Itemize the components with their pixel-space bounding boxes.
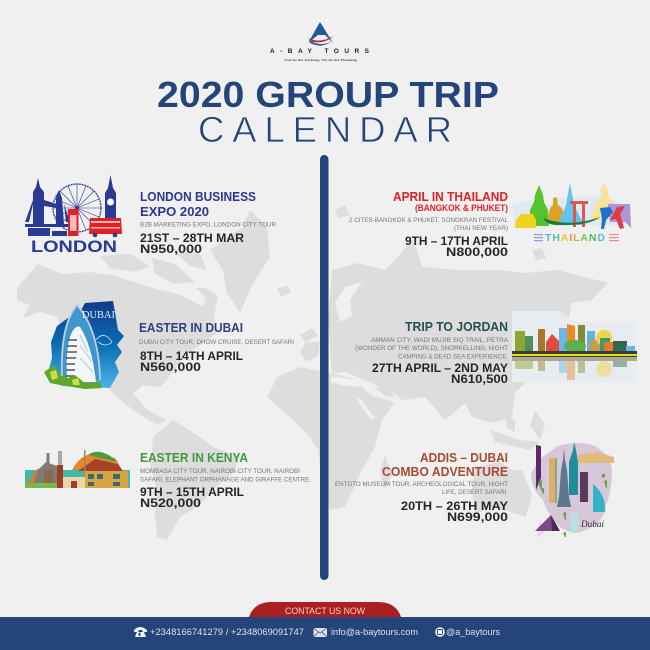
- text: Jordan details: CAMPING & DEAD SEA EXPERIENCE.: [398, 354, 508, 360]
- world map background: [17, 205, 608, 540]
- panel: April in Thailand: [349, 183, 631, 259]
- panel: London business expo: [25, 175, 276, 256]
- text: London details: LONDON BUSINESS: [140, 189, 256, 204]
- title: [157, 74, 499, 150]
- text: Kenya details: [140, 450, 311, 510]
- company logo: A-BAY TOURS: [270, 48, 370, 55]
- text: Thailand details: 2 CITES-BANGKOK & PHUKET, SONGKRAN FESTIVAL: [349, 217, 508, 224]
- icon: envelope: [314, 628, 327, 637]
- text: Addis details: 20TH – 26TH MAY: [401, 499, 508, 513]
- panel: Easter in Dubai: [44, 301, 294, 389]
- panel: Addis - Dubai combo adventure: [335, 442, 614, 537]
- contact footer bar: [0, 617, 650, 650]
- text: Jordan details: AMMAN CITY, WADI MUJIB SIQ TRAIL, PETRA: [371, 337, 508, 344]
- text: email: info@a-baytours.com: [331, 627, 418, 637]
- text: Thailand details: [349, 189, 509, 259]
- text: Kenya details: MOMBASA CITY TOUR, NAIROBI CITY TOUR, NAIROBI: [140, 468, 300, 475]
- text: Thailand details: (BANGKOK & PHUKET): [415, 203, 508, 213]
- text: Kenya details: 9TH – 15TH APRIL: [140, 485, 245, 499]
- icon: Dubai illustration: Dubai: [580, 519, 605, 529]
- text: London details: [140, 189, 276, 256]
- contact button: CONTACT US NOW: [285, 606, 365, 617]
- text: Thailand details: N800,000: [446, 245, 508, 259]
- contact button: [249, 602, 401, 617]
- text: Jordan details: 27TH APRIL – 2ND MAY: [372, 361, 508, 375]
- text: Dubai details: [139, 320, 294, 374]
- text: Kenya details: N520,000: [140, 496, 201, 510]
- text: London details: EXPO 2020: [140, 204, 209, 219]
- icon: London skyline: LONDON: [31, 238, 117, 256]
- panel: Easter in Kenya: [25, 450, 311, 510]
- text: Jordan details: TRIP TO JORDAN: [405, 319, 508, 334]
- text: Kenya details: EASTER IN KENYA: [140, 450, 249, 465]
- text: Addis details: LIFE, DESERT SAFARI.: [442, 489, 508, 496]
- icon: Burj Al Arab: DUBAI: [82, 309, 115, 321]
- icon: Dubai illustration: [531, 442, 614, 537]
- company logo: You do the Packing, We do the Planning: [284, 58, 357, 62]
- icon: Kenya landmarks: [25, 450, 130, 488]
- text: Addis details: ENTOTO MUSEUM TOUR, ARCHEOLOGICAL TOUR, NIGHT: [335, 481, 508, 488]
- text: London details: B2B MARKETING EXPO, LONDON CITY TOUR: [140, 222, 276, 228]
- text: Dubai details: EASTER IN DUBAI: [139, 320, 243, 335]
- text: London details: N950,000: [140, 242, 202, 256]
- text: London details: 21ST – 28TH MAR: [140, 231, 244, 245]
- text: Jordan details: (WONDER OF THE WORLD), SNORKELLING, NIGHT: [355, 345, 508, 352]
- text: Dubai details: 8TH – 14TH APRIL: [140, 349, 244, 363]
- text: Addis details: ADDIS – DUBAI: [420, 450, 508, 465]
- icon: Burj Al Arab: [44, 301, 124, 389]
- icon: instagram: [435, 627, 445, 637]
- text: phone numbers: +2348166741279 / +2348069091747: [150, 627, 304, 637]
- title: 2020 GROUP TRIP: [157, 74, 499, 115]
- icon: London skyline: [25, 175, 122, 256]
- text: Jordan details: N610,500: [451, 372, 508, 386]
- title: CALENDAR: [198, 109, 452, 150]
- panel: Trip to Jordan: [355, 311, 637, 386]
- icon: Jordan skyline: [512, 311, 637, 382]
- text: Dubai details: N560,000: [140, 360, 201, 374]
- text: Addis details: COMBO ADVENTURE: [382, 464, 508, 479]
- text: Thailand details: 9TH – 17TH APRIL: [405, 234, 509, 248]
- text: Thailand details: APRIL IN THAILAND: [393, 189, 508, 204]
- text: Addis details: N699,000: [447, 510, 508, 524]
- central timeline bar: [320, 155, 328, 580]
- company logo: [270, 22, 370, 62]
- text: Kenya details: SAFARI, ELEPHANT ORPHANAGE AND GIRAFFE CENTRE.: [140, 476, 311, 484]
- icon: telephone: [134, 627, 147, 637]
- text: Jordan details: [355, 319, 508, 386]
- text: Thailand details: (THAI NEW YEAR): [454, 225, 508, 232]
- text: Dubai details: DUBAI CITY TOUR, DHOW CRUISE, DESERT SAFARI: [139, 339, 294, 346]
- icon: Thailand landmarks: [512, 183, 631, 244]
- icon: Thailand landmarks: THAILAND: [545, 232, 605, 244]
- text: Addis details: [335, 450, 508, 524]
- text: instagram handle: @a_baytours: [446, 627, 500, 637]
